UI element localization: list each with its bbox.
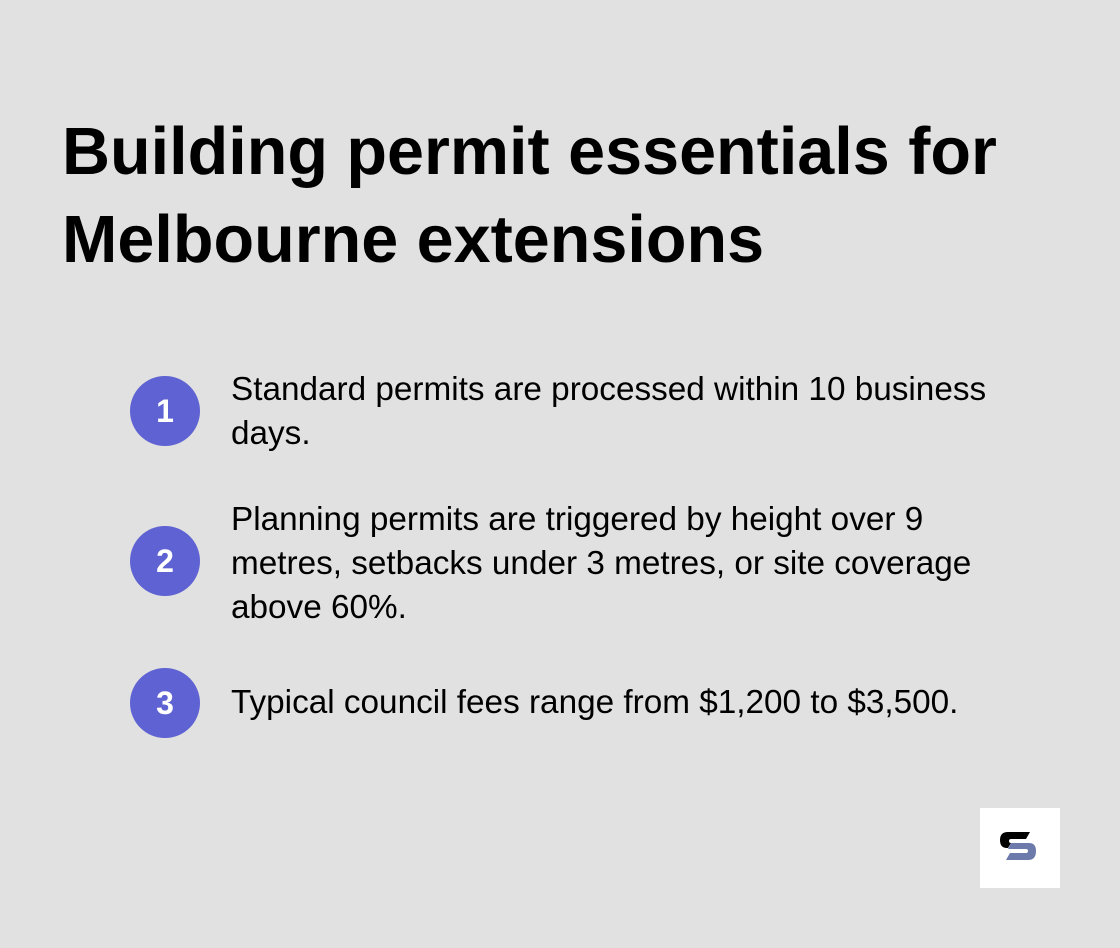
badge 3	[130, 668, 200, 738]
badge 2: 2	[156, 543, 174, 579]
badge 3: 3	[156, 685, 174, 721]
badge 1: 1	[156, 393, 174, 429]
title: Building permit essentials for	[62, 115, 997, 189]
item 1	[130, 371, 986, 452]
badge 1	[130, 376, 200, 446]
badge 2	[130, 526, 200, 596]
title	[62, 115, 997, 277]
text 2: Planning permits are triggered by height over 9 metres, setbacks under 3 metres, or site coverage above 60%.	[231, 501, 971, 626]
logo	[980, 808, 1060, 888]
item 2	[130, 501, 971, 626]
text 3: Typical council fees range from $1,200 to $3,500.	[231, 684, 958, 721]
item 3	[130, 668, 958, 738]
text 1: Standard permits are processed within 10 business days.	[231, 371, 986, 452]
title: Melbourne extensions	[62, 203, 764, 277]
